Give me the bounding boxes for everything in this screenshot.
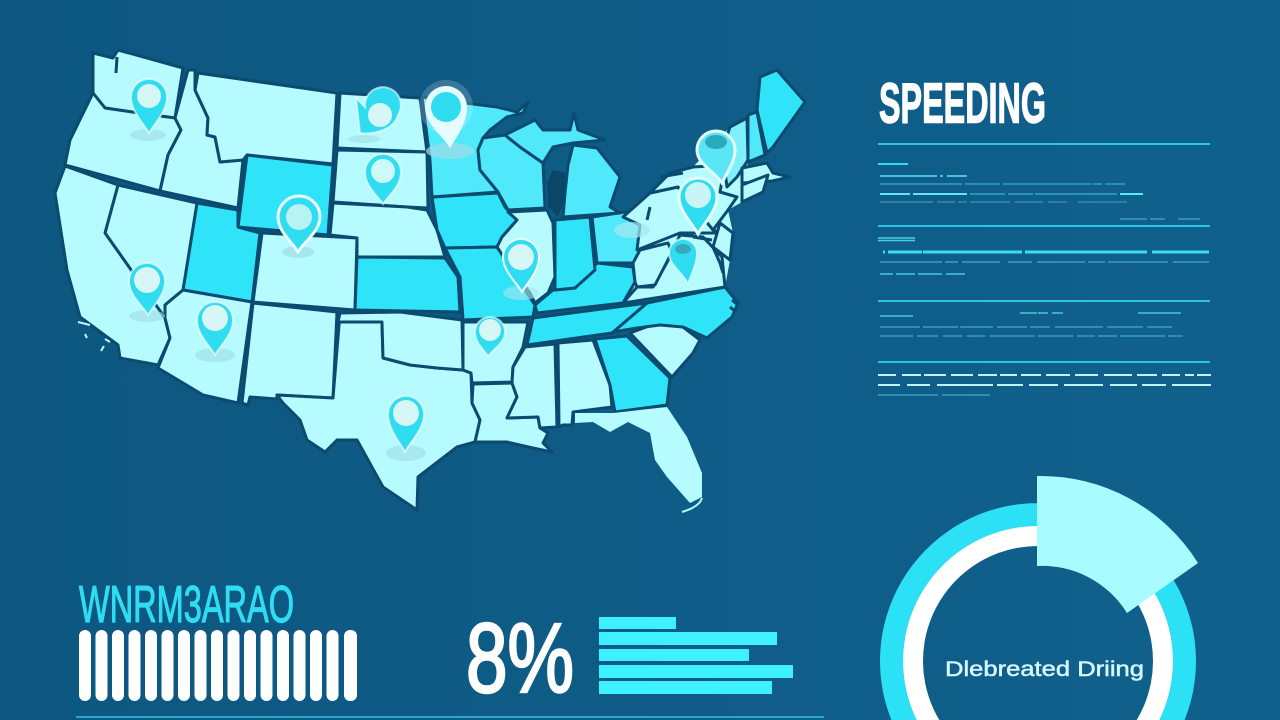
pin: Minnesota xyxy=(419,80,474,159)
map location pins xyxy=(129,79,735,461)
heading: SPEEDING: SPEEDING xyxy=(879,72,1046,136)
heading: bottom-left label: WNRM3ARAO xyxy=(79,576,294,634)
pin ripple: Ohio xyxy=(614,222,650,238)
text block: first section xyxy=(878,164,1200,219)
statistic: 8%: 8% xyxy=(466,603,574,713)
pin: Texas xyxy=(386,396,426,461)
pin: Arkansas xyxy=(475,317,505,356)
text block: second section xyxy=(878,238,1209,274)
pin: North Dakota xyxy=(348,87,401,143)
text block: fourth section xyxy=(878,375,1211,395)
pin: Missouri xyxy=(503,239,539,300)
highlighted wedge xyxy=(1037,476,1198,613)
panel: text rows beside the map xyxy=(878,144,1211,395)
map of the United States xyxy=(55,50,805,512)
pin: South Dakota xyxy=(365,154,401,204)
divider rules xyxy=(878,144,1210,362)
donut label: Dlebreated Driing xyxy=(945,658,1144,681)
pin: Virginia xyxy=(669,239,697,284)
pin: California xyxy=(129,263,165,322)
text block: third section xyxy=(880,313,1183,336)
bar chart: horizontal cyan bars xyxy=(599,617,793,694)
pin: lower New York xyxy=(679,178,717,234)
pin: Colorado xyxy=(278,196,320,258)
pin: Washington xyxy=(130,79,167,141)
donut chart: distracted driving xyxy=(880,476,1198,720)
pin: Arizona xyxy=(195,302,235,362)
pin: upper New York xyxy=(697,131,735,183)
bar row: white vertical pills xyxy=(79,630,357,701)
bottom divider xyxy=(76,716,824,718)
